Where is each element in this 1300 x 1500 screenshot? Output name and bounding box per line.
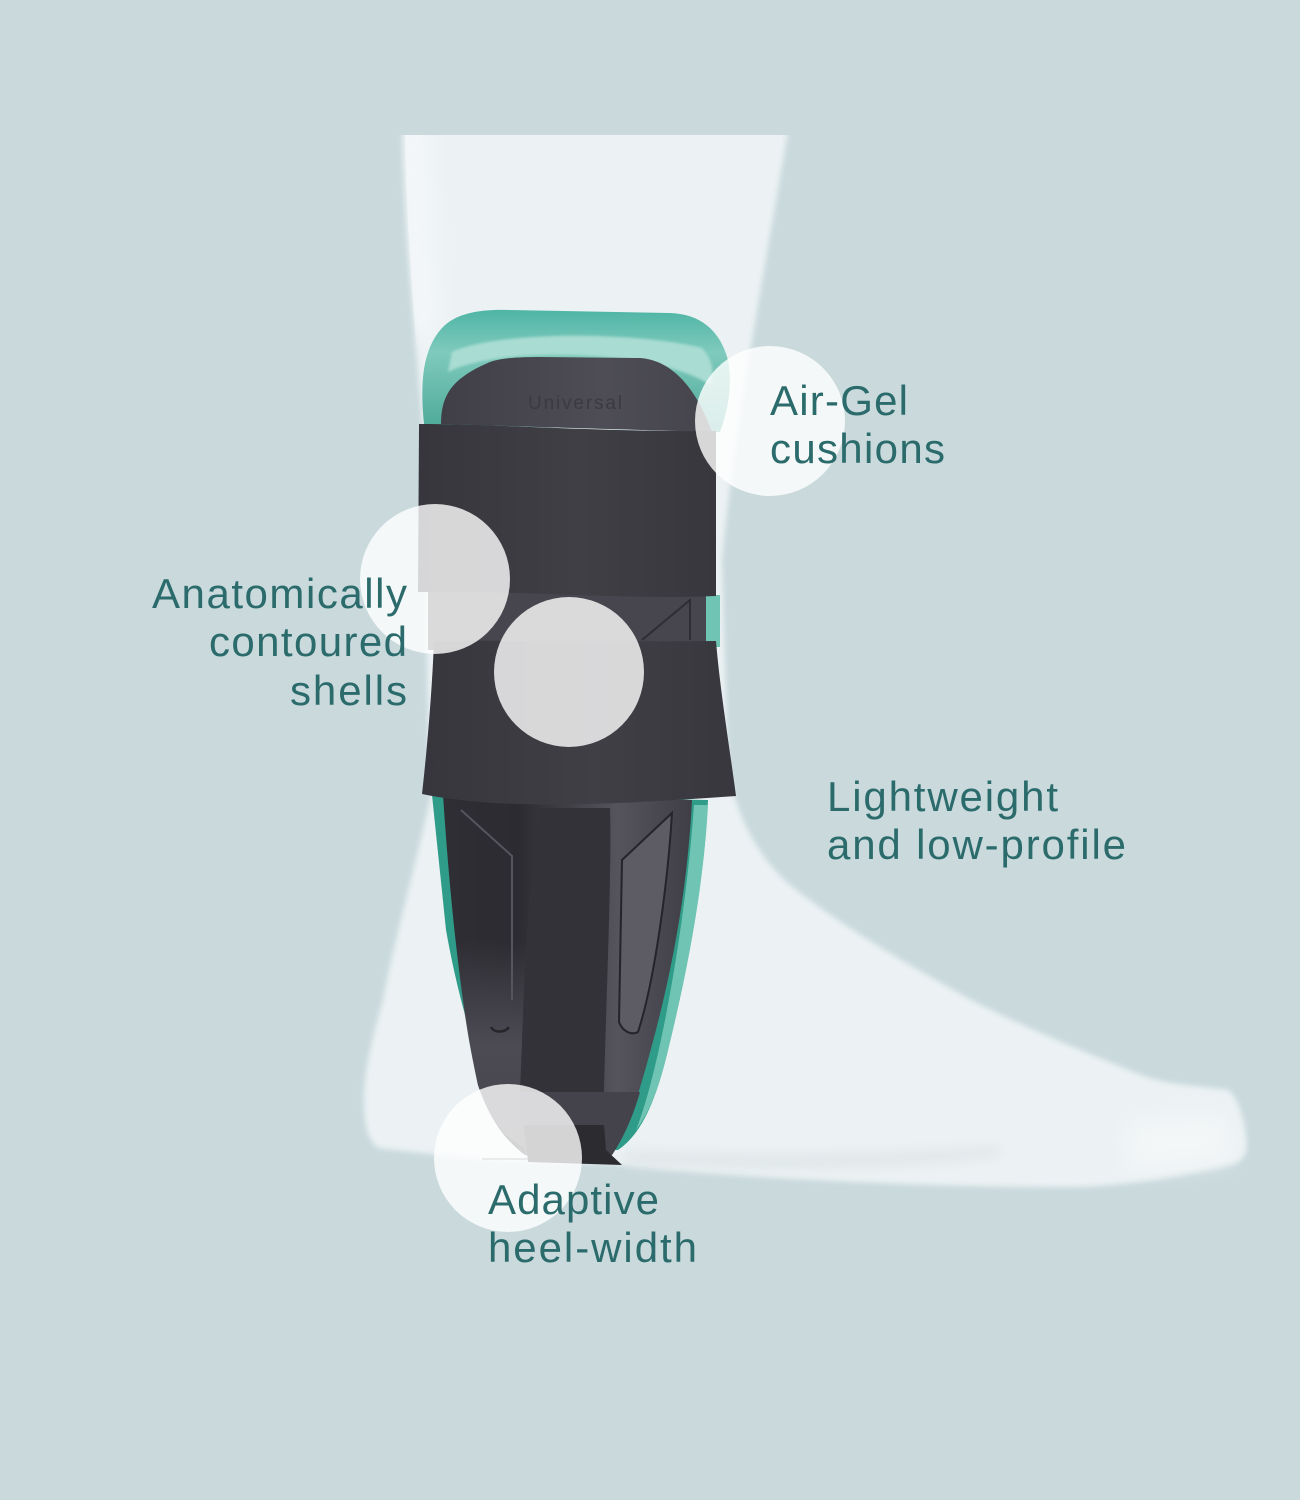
shell lower left ridge: [461, 810, 512, 1000]
highlight circle: adaptive heel-width: [434, 1084, 582, 1232]
label: Anatomically contoured shells: Anatomically: [152, 570, 407, 617]
label: Lightweight and low-profile: and low-profile: [827, 821, 1126, 868]
green gel cushion middle edge: [702, 595, 720, 647]
label: Anatomically contoured shells: shells: [290, 667, 407, 714]
green gel cushion upper: [422, 310, 730, 432]
velcro strap lower tab: [524, 1125, 622, 1165]
label: Lightweight and low-profile: Lightweight: [827, 773, 1058, 820]
label: Adaptive heel-width: heel-width: [488, 1224, 697, 1271]
label: Air-Gel cushions: Air-Gel: [770, 377, 908, 424]
shell middle: [428, 590, 706, 650]
label: Air-Gel cushions: [770, 377, 945, 472]
brand emboss: Universal: [528, 393, 622, 414]
highlight circle: anatomically contoured shells: [360, 504, 510, 654]
shell lower bottom shading: [520, 1092, 640, 1155]
label: Anatomically contoured shells: contoured: [209, 618, 407, 665]
shell lower left shading: [456, 940, 530, 1150]
highlight circle: air-gel cushions: [695, 346, 845, 496]
highlight circle: lightweight and low-profile: [494, 597, 644, 747]
label: Air-Gel cushions: cushions: [770, 425, 945, 472]
shell middle ridges: [642, 600, 690, 640]
gel highlight: [448, 336, 712, 385]
foot silhouette: [364, 125, 1247, 1187]
shell lower: [443, 795, 692, 1160]
label: Adaptive heel-width: Adaptive: [488, 1176, 659, 1223]
label: Adaptive heel-width: [488, 1176, 697, 1271]
base line: [482, 1158, 528, 1160]
leg light edge: [405, 135, 417, 332]
label: Lightweight and low-profile: [827, 773, 1126, 868]
lower strap: [422, 641, 736, 804]
shell upper: [441, 357, 712, 432]
velcro strap vertical: [520, 808, 610, 1092]
upper strap: [418, 424, 716, 597]
shell lower left notch: [491, 1027, 509, 1032]
gel highlight lower: [636, 805, 708, 1130]
label: Anatomically contoured shells: [152, 570, 407, 714]
ankle brace: [418, 310, 736, 1165]
shell lower right ridge: [619, 813, 672, 1033]
ground shadow: [625, 1146, 1000, 1169]
green gel cushion lower: [432, 795, 708, 1150]
toe highlight: [1130, 1118, 1228, 1168]
